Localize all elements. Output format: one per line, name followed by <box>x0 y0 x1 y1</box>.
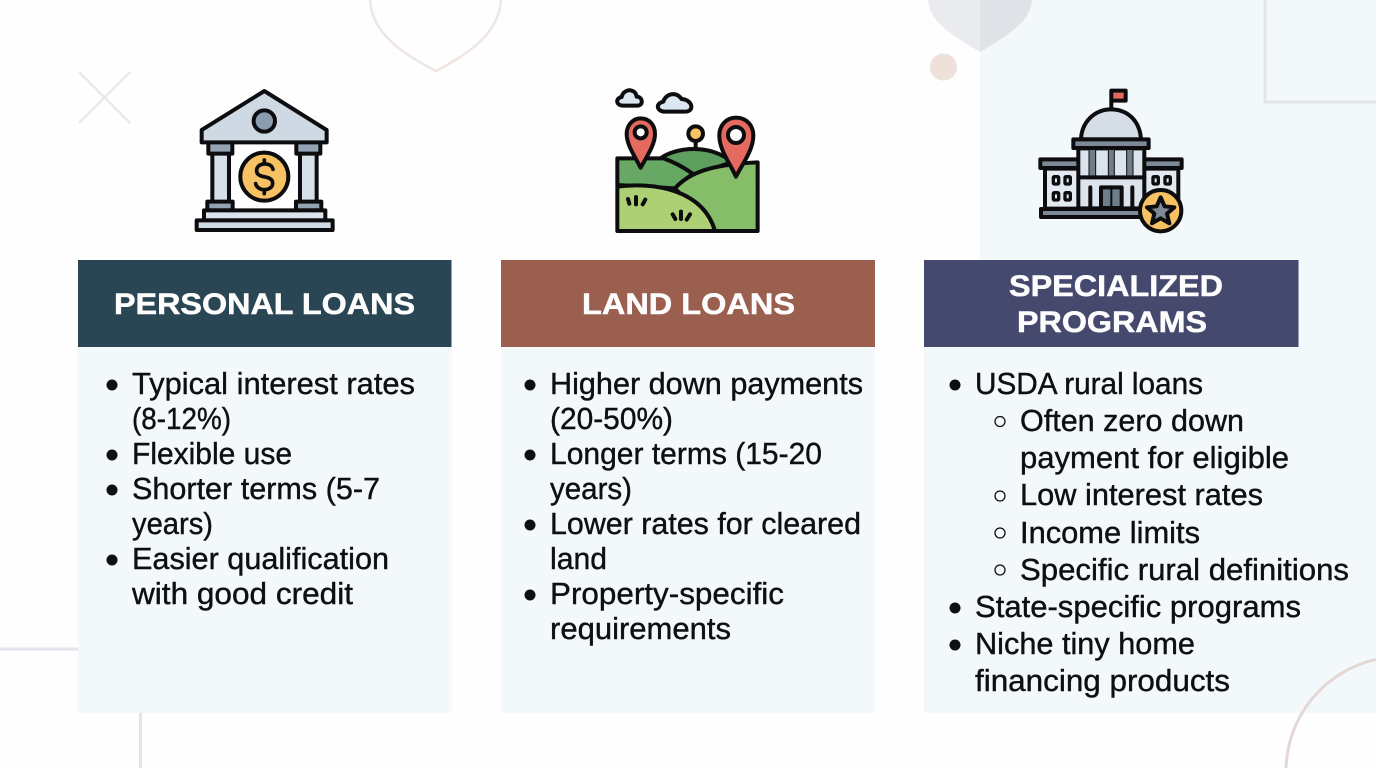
icon: land with hills and map pins <box>617 90 758 231</box>
list: personal loan features: (8-12%) <box>132 401 231 436</box>
list: specialized program features: payment for eligible <box>1020 440 1289 475</box>
list: land loan features <box>524 366 863 646</box>
list: personal loan features: Typical interest rates <box>132 366 415 401</box>
icon: capitol building with star badge <box>1040 91 1182 231</box>
list: specialized program features: State-specific programs <box>975 589 1301 624</box>
list: personal loan features: Shorter terms (5-7 <box>132 471 380 506</box>
list: personal loan features: years) <box>132 506 213 541</box>
background tint panel <box>980 0 1376 713</box>
list: specialized program features: Low interest rates <box>1020 477 1263 512</box>
list: specialized program features: Specific rural definitions <box>1020 552 1349 587</box>
list: land loan features: Lower rates for cleared <box>550 506 861 541</box>
list: land loan features: (20-50%) <box>550 401 673 436</box>
heading: land loans: LAND LOANS <box>582 288 795 321</box>
heading: specialized programs <box>924 260 1298 347</box>
list: land loan features: years) <box>550 471 632 506</box>
list: personal loan features: with good credit <box>131 576 353 611</box>
heading: specialized programs: SPECIALIZED <box>1009 270 1223 303</box>
list: land loan features: Longer terms (15-20 <box>550 436 822 471</box>
list: specialized program features: Income limits <box>1020 515 1200 550</box>
list: specialized program features: USDA rural loans <box>975 366 1203 401</box>
panel: land loans <box>501 260 875 713</box>
list: land loan features: land <box>550 541 607 576</box>
list: personal loan features: Easier qualification <box>132 541 389 576</box>
heading: specialized programs: PROGRAMS <box>1017 306 1207 339</box>
list: land loan features: requirements <box>550 611 731 646</box>
list: land loan features: Property-specific <box>550 576 784 611</box>
list: land loan features: Higher down payments <box>550 366 863 401</box>
panel: personal loans <box>78 260 452 713</box>
list: personal loan features: Flexible use <box>132 436 292 471</box>
heading: personal loans <box>78 260 452 347</box>
panel: specialized programs <box>924 260 1349 713</box>
list: personal loan features <box>106 366 415 611</box>
list: specialized program features: financing products <box>975 663 1230 698</box>
list: specialized program features: Niche tiny home <box>975 626 1195 661</box>
icon: bank with dollar coin <box>197 91 333 230</box>
list: specialized program features <box>950 366 1349 698</box>
heading: personal loans: PERSONAL LOANS <box>114 288 415 321</box>
list: specialized program features: Often zero down <box>1020 403 1244 438</box>
heading: land loans <box>501 260 875 347</box>
